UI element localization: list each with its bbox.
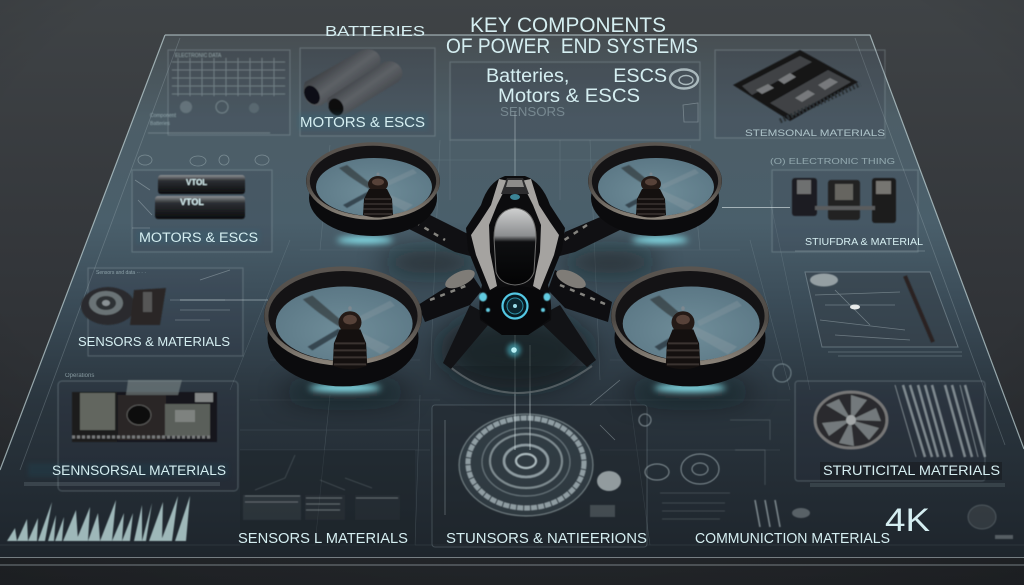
faint sensors label: SENSORS — [500, 104, 565, 119]
icon: vtol batteries: VTOL — [186, 178, 207, 187]
title line two: OF POWER END SYSTEMS — [446, 35, 698, 58]
icon: schematic disc — [810, 274, 838, 286]
subtitle: batteries and escs: Batteries, ESCS — [486, 66, 667, 87]
icon: motor units — [792, 178, 896, 223]
landing arc — [449, 366, 592, 393]
drone — [264, 143, 769, 402]
label: sensors and materials: SENSORS & MATERIALS — [78, 335, 230, 349]
icon: vtol batteries — [155, 175, 245, 219]
schematic detail — [639, 364, 810, 527]
label: struticital materials: STRUTICITAL MATERIALS — [823, 462, 1000, 478]
landing legs — [443, 305, 596, 369]
icon: small disc — [597, 471, 621, 491]
panel: top right chip module — [715, 50, 885, 139]
icon: battery cells — [301, 49, 402, 118]
underglow — [309, 236, 726, 392]
label: sennsorsal materials: SENNSORSAL MATERIALS — [52, 462, 226, 478]
label: stemsonal materials: STEMSONAL MATERIALS — [745, 128, 885, 139]
scribbled heading row — [138, 155, 269, 166]
glow dot — [507, 343, 521, 357]
icon: sensor module — [81, 287, 166, 325]
panel: top left schematic: ELECTRONIC DATA — [175, 53, 222, 59]
icon: rod — [905, 276, 933, 342]
panel: motor units: (O) ELECTRONIC THING — [770, 156, 895, 166]
badge: 4K: 4K — [885, 502, 930, 538]
connector lines — [180, 112, 530, 450]
arms — [395, 205, 628, 322]
panel: communication schematics — [639, 364, 890, 547]
panel: top left schematic: Component — [150, 113, 176, 119]
chart: spike bars — [7, 496, 190, 541]
panel: vtol batteries — [132, 155, 272, 252]
icon: concentric dial — [459, 414, 593, 516]
ring: bottom right — [611, 267, 769, 386]
icon: swirl — [670, 70, 698, 88]
icon: vtol batteries: VTOL — [180, 197, 204, 207]
panel: structural fan — [795, 381, 1005, 486]
drone shadow — [280, 250, 755, 402]
panel: top left schematic: Batteries — [150, 121, 170, 127]
icon: fan — [815, 392, 887, 448]
nose — [480, 286, 550, 335]
label: communiction materials: COMMUNICTION MATERIALS — [695, 531, 890, 547]
ring: top left — [306, 143, 440, 236]
panel: batteries — [298, 23, 435, 136]
panel: motor units — [722, 156, 925, 252]
panel: sensors and materials — [78, 268, 243, 356]
panel: sensors and materials: Sensors and data ·· · · — [96, 270, 146, 276]
icon: faint lower right dial — [968, 505, 1013, 539]
title block — [446, 14, 700, 140]
ring: bottom left — [264, 267, 422, 386]
fuselage — [466, 176, 565, 335]
ring: top right — [588, 143, 722, 236]
panel: circuit modules: Operations — [65, 373, 94, 379]
sensor eye — [502, 294, 528, 318]
icon: chip module — [733, 50, 860, 121]
label: sensors l materials: SENSORS L MATERIALS — [238, 530, 408, 547]
icon: circuit boards — [72, 380, 217, 442]
label: motors and escs: MOTORS & ESCS — [139, 230, 258, 245]
canopy — [494, 208, 536, 285]
label: stiufdra and material: STIUFDRA & MATERIAL — [805, 236, 923, 248]
label: motors and escs: MOTORS & ESCS — [300, 114, 425, 131]
subtitle: motors and escs: Motors & ESCS — [498, 86, 640, 107]
panel: sensors schematics — [238, 450, 415, 547]
panel: structural schematic — [805, 272, 962, 356]
side lights — [479, 292, 550, 312]
panel: top left schematic — [148, 50, 290, 135]
panel: target dial — [432, 380, 647, 547]
title line one: KEY COMPONENTS — [470, 14, 666, 37]
panel: circuit modules — [24, 373, 238, 491]
label: stunsors and natieerions: STUNSORS & NATIEERIONS — [446, 530, 647, 547]
icon: vent stripes — [895, 385, 985, 457]
schematic detail — [243, 455, 400, 520]
heading: batteries: BATTERIES — [325, 23, 425, 40]
